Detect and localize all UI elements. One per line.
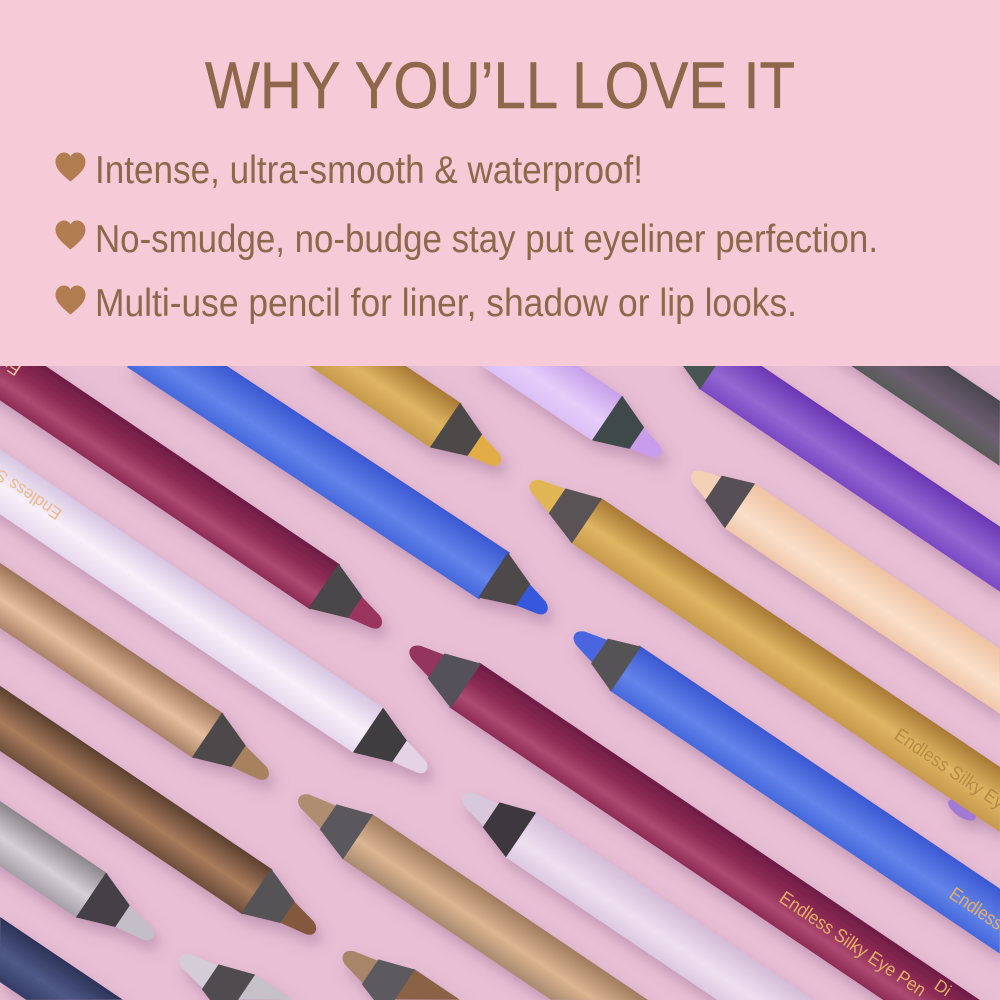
pencil: white pearl — [0, 439, 442, 792]
pencil: peach — [677, 451, 1000, 714]
pencil: bronze, bottom stub — [332, 932, 460, 1000]
bullet text 3: Multi-use pencil for liner, shadow or lip looks. — [95, 282, 797, 325]
header panel — [0, 0, 1000, 366]
purple fragment behind gold pencil — [945, 795, 979, 825]
pencil: blue, centre — [560, 612, 1000, 954]
pencil: tan, bottom — [284, 775, 648, 1000]
icon: heart bullet 1 — [56, 152, 86, 182]
bullet text 1: Intense, ultra-smooth & waterproof! — [95, 149, 643, 192]
pencil: blue, top — [127, 320, 563, 634]
pencil: gold, centre — [516, 461, 1000, 832]
pencil: pale lilac, bottom — [448, 773, 814, 1000]
pencil: gold, top — [306, 319, 516, 485]
pencil: silver — [0, 789, 168, 959]
pencil: navy, bottom left — [0, 917, 123, 1000]
pencil label: maroon continuation: Di — [931, 976, 955, 1000]
icon: heart bullet 3 — [56, 286, 86, 314]
icon: heart bullet 2 — [56, 220, 86, 250]
pencil: purple, top right — [668, 323, 1000, 592]
pencil: rose gold — [0, 550, 283, 799]
photo background: pink surface — [0, 366, 1000, 1000]
eyeliner pencils photo — [0, 279, 1000, 1000]
pencil: bronze — [0, 676, 331, 954]
bullet text 2: No-smudge, no-budge stay put eyeliner perfection. — [95, 218, 878, 261]
pencil: maroon, top left — [0, 323, 397, 648]
pencil: maroon, centre — [395, 626, 980, 1000]
pencil: dark grey, top right corner — [788, 279, 1000, 466]
pencil: silver, bottom stub — [170, 934, 292, 1000]
pencil: lilac, top — [476, 317, 676, 477]
title: WHY YOU’LL LOVE IT — [205, 48, 795, 122]
